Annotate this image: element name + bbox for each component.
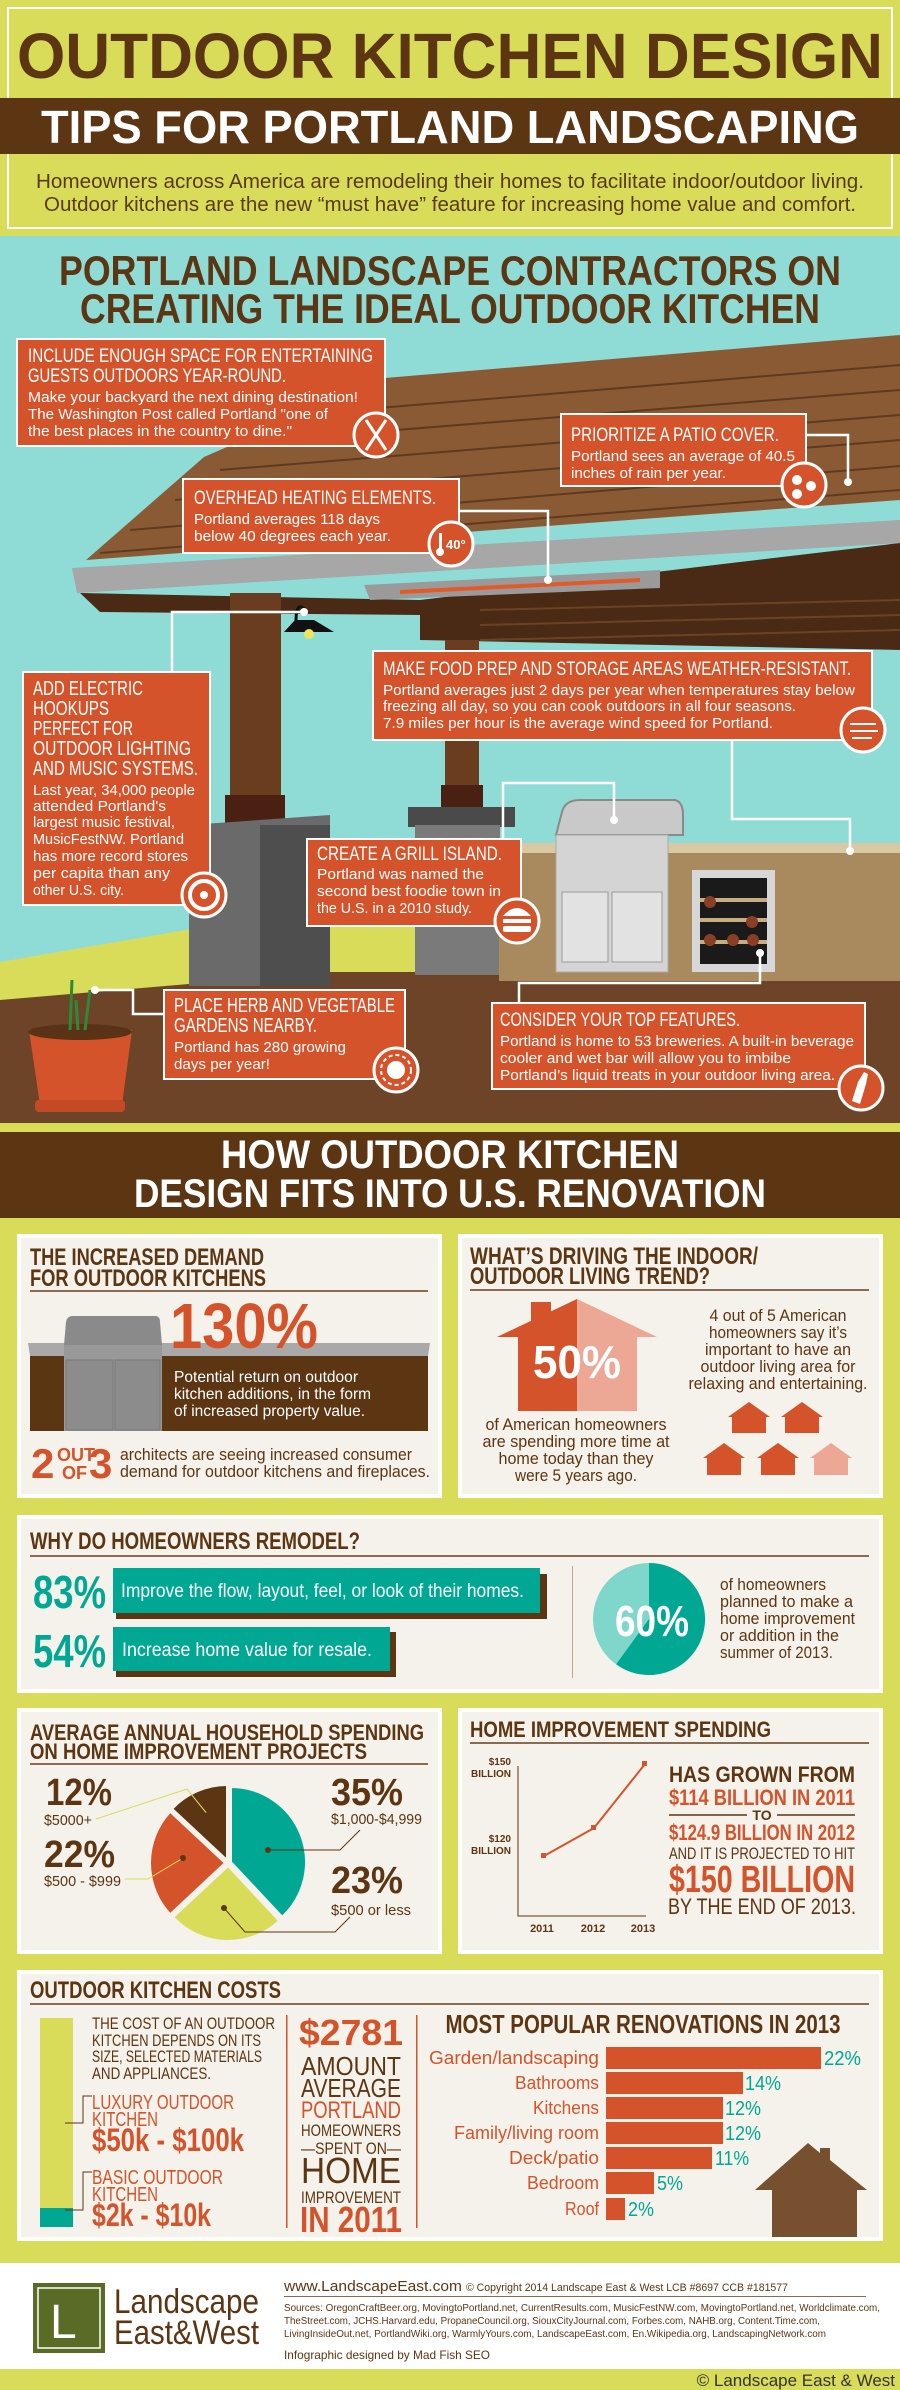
callout: electric hookups: per capita than any (33, 865, 171, 882)
bar: 54%: 54% (33, 1625, 106, 1677)
panel: outdoor kitchen costs: KITCHEN (92, 2184, 158, 2206)
pie: 60%: 60% (615, 1597, 689, 1646)
callout: herb garden: GARDENS NEARBY. (174, 1015, 317, 1037)
callout: entertaining: INCLUDE ENOUGH SPACE FOR ENTERTAINING (28, 346, 373, 367)
growth text: HAS GROWN FROM (669, 1762, 855, 1787)
stat: 2 out of 3 (31, 1440, 430, 1487)
callout: entertaining: Make your backyard the next dining destination! (28, 389, 358, 406)
panel: why remodel: summer of 2013. (720, 1643, 833, 1662)
callout: electric hookups: OUTDOOR LIGHTING (33, 738, 191, 760)
icon: thermometer (429, 522, 473, 566)
callout: grill island: CREATE A GRILL ISLAND. (317, 844, 502, 865)
panel: outdoor kitchen costs: LUXURY OUTDOOR (92, 2092, 234, 2114)
panel: indoor/outdoor trend: of American homeowners (486, 1415, 666, 1434)
logo (33, 2283, 259, 2353)
footer text: Sources: OregonCraftBeer.org, MovingtoPortland.net, CurrentResults.com, MusicFestNW.com, MovingtoPortland.net, Worldclimate.com, (284, 2303, 880, 2314)
callout: entertaining: The Washington Post called Portland "one of (28, 406, 329, 423)
callout: entertaining: the best places in the country to dine." (28, 423, 292, 440)
stat: 2 out of 3: 2 (31, 1440, 54, 1487)
lamp (284, 607, 334, 639)
callout: heating: Portland averages 118 days (194, 511, 380, 528)
panel: increased demand (19, 1236, 440, 1496)
footer (0, 2263, 900, 2390)
posts (230, 593, 281, 825)
wine cooler (692, 870, 775, 972)
callout: top features (492, 1003, 883, 1110)
line chart: 2011 (530, 1923, 554, 1935)
callout: electric hookups: PERFECT FOR (33, 718, 133, 740)
icon: small houses (703, 1402, 852, 1475)
line chart: 2013 (631, 1923, 655, 1935)
roof and pergola (72, 335, 900, 986)
pie chart (150, 1785, 306, 1941)
stat: $2781: IN 2011 (300, 2199, 402, 2240)
stat: $2781: AVERAGE (301, 2073, 401, 2103)
icon: record (182, 873, 226, 917)
callout: electric hookups: AND MUSIC SYSTEMS. (33, 758, 198, 780)
callout: heating (183, 479, 473, 566)
line chart: BILLION (471, 1846, 511, 1857)
stat: $2781: IMPROVEMENT (301, 2188, 401, 2207)
stat: 2 out of 3: demand for outdoor kitchens and fireplaces. (120, 1462, 430, 1481)
panel: increased demand: THE INCREASED DEMAND (30, 1244, 264, 1271)
panel: why remodel: home improvement (720, 1609, 855, 1628)
header background (0, 0, 900, 236)
bar chart: popular renovations: Bedroom (527, 2173, 599, 2193)
callout: electric hookups: MusicFestNW. Portland (33, 831, 184, 848)
panel: household spending pie: ON HOME IMPROVEMENT PROJECTS (30, 1739, 367, 1764)
stat: 2 out of 3: 3 (89, 1440, 112, 1487)
intro text: Outdoor kitchens are the new “must have” feature for increasing home value and comfort. (44, 194, 856, 216)
renovation band heading (0, 1132, 900, 1218)
stat: $2781: PORTLAND (301, 2097, 401, 2124)
bar chart: popular renovations: Garden/landscaping (429, 2048, 599, 2068)
line chart (471, 1757, 655, 1935)
panel: indoor/outdoor trend: relaxing and entertaining. (688, 1374, 868, 1393)
callout: grill island: Portland was named the (317, 866, 484, 883)
growth text: TO (752, 1807, 772, 1823)
stat: 2 out of 3: architects are seeing increased consumer (120, 1445, 412, 1464)
bar: 54% (33, 1625, 396, 1677)
callout: grill island: second best foodie town in (317, 883, 501, 900)
icon: thermometer: 40° (446, 537, 466, 552)
callout: electric hookups: Last year, 34,000 people (33, 782, 195, 799)
icon: burger (495, 899, 539, 943)
callout: electric hookups: ADD ELECTRIC (33, 678, 143, 700)
counter (499, 847, 900, 981)
callout: food prep: freezing all day, so you can cook outdoors in all four seasons. (383, 698, 796, 715)
renovation band heading: DESIGN FITS INTO U.S. RENOVATION (134, 1172, 766, 1216)
callout: electric hookups: other U.S. city. (33, 882, 124, 899)
panel: indoor/outdoor trend: home today than they (498, 1449, 654, 1468)
section heading: contractors (59, 247, 841, 332)
bar chart: popular renovations: 11% (715, 2148, 749, 2170)
bar chart: popular renovations: 2% (628, 2199, 654, 2221)
panel: increased demand: FOR OUTDOOR KITCHENS (30, 1265, 266, 1292)
callout: top features: CONSIDER YOUR TOP FEATURES. (500, 1010, 740, 1031)
line chart: 2012 (581, 1923, 605, 1935)
panel: household spending pie: 22% (44, 1834, 115, 1876)
panel: outdoor kitchen costs: SIZE, SELECTED MATERIALS (92, 2047, 262, 2066)
panel: household spending pie: $1,000-$4,999 (331, 1811, 422, 1828)
panel: outdoor kitchen costs (19, 1972, 881, 2240)
title: OUTDOOR KITCHEN DESIGN (17, 20, 883, 92)
subtitle band: TIPS FOR PORTLAND LANDSCAPING (41, 101, 859, 153)
panel: outdoor kitchen costs: KITCHEN DEPENDS ON ITS (92, 2031, 261, 2050)
bar chart: popular renovations: 22% (824, 2048, 861, 2070)
callout: electric hookups: has more record stores (33, 848, 188, 865)
panel: outdoor kitchen costs: $50k - $100k (92, 2122, 244, 2158)
stat: $2781 (299, 2012, 403, 2240)
bar chart: popular renovations: Roof (565, 2199, 600, 2219)
callout: grill island (307, 839, 539, 943)
icon: big house 50%: 50% (533, 1336, 621, 1388)
panel: household spending pie: 12% (46, 1772, 112, 1814)
bar chart: popular renovations: Bathrooms (515, 2073, 599, 2093)
bar chart: popular renovations (429, 2009, 861, 2221)
intro text: Homeowners across America are remodeling their homes to facilitate indoor/outdoor living. (36, 171, 864, 193)
panel: indoor/outdoor trend: homeowners say it’s (709, 1323, 847, 1342)
grill illustration (28, 1316, 430, 1431)
stat: 130%: 130% (170, 1290, 318, 1362)
icon: big house 50% (497, 1299, 657, 1411)
panel: indoor/outdoor trend: outdoor living area for (700, 1357, 856, 1376)
logo: L (50, 2296, 77, 2349)
line chart: BILLION (471, 1769, 511, 1780)
stat: 2 out of 3: OF (62, 1463, 87, 1483)
connector lines (95, 435, 850, 1014)
panel: why remodel (19, 1517, 881, 1691)
panel: why remodel: of homeowners (720, 1575, 826, 1594)
callout: entertaining (17, 339, 398, 457)
callout: top features: Portland’s liquid treats in your outdoor living area. (500, 1067, 835, 1084)
panel: indoor/outdoor trend (460, 1236, 881, 1496)
panel: why remodel: WHY DO HOMEOWNERS REMODEL? (30, 1528, 360, 1555)
callout: electric hookups (23, 672, 226, 917)
stat: $2781: AMOUNT (301, 2051, 401, 2081)
panel: outdoor kitchen costs: KITCHEN (92, 2109, 158, 2131)
stat: 2 out of 3: OUT (57, 1445, 95, 1465)
line chart: $150 (489, 1757, 511, 1768)
callout: patio cover: Portland sees an average of 40.5 (571, 448, 795, 465)
grill (556, 800, 683, 835)
plant pot (28, 980, 132, 1112)
callout: patio cover (561, 414, 826, 507)
footer text: www.LandscapeEast.com (283, 2278, 462, 2295)
footer: © Landscape East & West (697, 2371, 895, 2390)
callout: herb garden: Portland has 280 growing (174, 1039, 346, 1056)
bar chart: popular renovations: Kitchens (533, 2098, 599, 2118)
callout: herb garden: PLACE HERB AND VEGETABLE (174, 995, 395, 1017)
callout: electric hookups: HOOKUPS (33, 698, 109, 720)
icon: bottle (839, 1066, 883, 1110)
line chart: $120 (489, 1834, 511, 1845)
footer text: TheStreet.com, JCHS.Harvard.edu, PropaneCouncil.org, SiouxCityJournal.com, Forbes.com, NAHB.org, Content.Time.com, (284, 2316, 820, 2327)
growth text: $114 BILLION IN 2011 (669, 1785, 855, 1810)
bar: 54%: Increase home value for resale. (122, 1640, 372, 1661)
callout: top features: cooler and wet bar will allow you to imbibe (500, 1050, 791, 1067)
intro text (36, 171, 864, 216)
callout: entertaining: GUESTS OUTDOORS YEAR-ROUND. (28, 366, 286, 387)
callout: food prep: 7.9 miles per hour is the average wind speed for Portland. (383, 715, 773, 732)
panel: increased demand: Potential return on outdoor (174, 1369, 359, 1386)
footer text: © Copyright 2014 Landscape East & West LCB #8697 CCB #181577 (466, 2282, 788, 2294)
stat: $2781: —SPENT ON— (301, 2139, 401, 2158)
callout: patio cover: inches of rain per year. (571, 465, 726, 482)
panel: household spending pie: AVERAGE ANNUAL HOUSEHOLD SPENDING (30, 1720, 424, 1745)
callout: herb garden (164, 990, 418, 1092)
panel: indoor/outdoor trend: OUTDOOR LIVING TREND? (470, 1263, 710, 1290)
panel: household spending pie: $500 or less (331, 1902, 411, 1919)
panel: household spending pie: $500 - $999 (44, 1873, 121, 1890)
bar chart: popular renovations: Deck/patio (509, 2148, 599, 2168)
callout: top features: Portland is home to 53 breweries. A built-in beverage (500, 1033, 854, 1050)
bar: 83% (33, 1566, 547, 1619)
cost gauge (40, 2018, 92, 2227)
panel: household spending pie: 23% (331, 1860, 403, 1902)
icon: wind (841, 708, 885, 752)
panel: home improvement spending: HOME IMPROVEMENT SPENDING (470, 1717, 771, 1742)
callout: heating: OVERHEAD HEATING ELEMENTS. (194, 488, 436, 509)
icon: sun (374, 1048, 418, 1092)
lower background (0, 1218, 900, 2263)
stat: $2781: HOME (301, 2150, 401, 2191)
panel: indoor/outdoor trend: WHAT’S DRIVING THE INDOOR/ (470, 1243, 758, 1270)
icon: raindrops (782, 463, 826, 507)
pie: 60% (593, 1563, 705, 1675)
bar chart: popular renovations: 5% (657, 2173, 683, 2195)
panel: indoor/outdoor trend: 4 out of 5 American (710, 1306, 846, 1325)
bar: 83%: 83% (33, 1566, 106, 1618)
panel: indoor/outdoor trend: important to have an (705, 1340, 851, 1359)
stat: $2781: HOMEOWNERS (301, 2121, 401, 2140)
callout: herb garden: days per year! (174, 1056, 270, 1073)
footer text (283, 2278, 880, 2362)
callout: food prep: Portland averages just 2 days per year when temperatures stay below (383, 682, 855, 699)
logo: East&West (114, 2314, 259, 2352)
panel: increased demand: kitchen additions, in the form (174, 1386, 371, 1403)
icon: brown house (755, 2143, 867, 2237)
panel: outdoor kitchen costs: AND APPLIANCES. (92, 2064, 211, 2083)
panel: household spending pie (19, 1710, 440, 1952)
bar chart: popular renovations: 12% (725, 2098, 761, 2120)
callout: food prep (373, 651, 885, 752)
bar chart: popular renovations: 12% (725, 2123, 761, 2145)
icon: fork and knife (354, 413, 398, 457)
footer text: LivingInsideOut.net, PortlandWiki.org, WarmlyYours.com, LandscapeEast.com, En.Wikipedia.org, LandscapingNetwork.com (284, 2329, 826, 2340)
panel: outdoor kitchen costs: OUTDOOR KITCHEN COSTS (30, 1977, 281, 2004)
bar chart: popular renovations: 14% (745, 2073, 781, 2095)
growth text: BY THE END OF 2013. (668, 1894, 856, 1919)
growth text (668, 1762, 856, 1919)
panel: home improvement spending (460, 1710, 881, 1952)
panel: indoor/outdoor trend: were 5 years ago. (514, 1466, 637, 1485)
stat: $2781: $2781 (299, 2012, 403, 2053)
bar: 83%: Improve the flow, layout, feel, or look of their homes. (121, 1581, 524, 1602)
callout: electric hookups: attended Portland's (33, 798, 166, 815)
panel: household spending pie: $5000+ (44, 1812, 92, 1829)
footer text: Infographic designed by Mad Fish SEO (284, 2348, 490, 2362)
logo: Landscape (114, 2283, 259, 2321)
callout: grill island: the U.S. in a 2010 study. (317, 900, 472, 917)
bar chart: popular renovations: Family/living room (454, 2123, 599, 2143)
panel: outdoor kitchen costs: $2k - $10k (92, 2197, 211, 2233)
callout: patio cover: PRIORITIZE A PATIO COVER. (571, 425, 779, 446)
panel: outdoor kitchen costs: BASIC OUTDOOR (92, 2167, 223, 2189)
callout: heating: below 40 degrees each year. (194, 528, 391, 545)
panel: why remodel: or addition in the (720, 1626, 839, 1645)
panel: increased demand: of increased property value. (174, 1403, 365, 1420)
panel: indoor/outdoor trend: are spending more time at (482, 1432, 670, 1451)
panel: household spending pie: 35% (331, 1772, 403, 1814)
scene background (0, 236, 900, 1132)
renovation band heading: HOW OUTDOOR KITCHEN (221, 1133, 679, 1177)
panel: outdoor kitchen costs: THE COST OF AN OUTDOOR (92, 2014, 275, 2033)
panel: why remodel: planned to make a (720, 1592, 854, 1611)
callout: electric hookups: largest music festival, (33, 814, 175, 831)
